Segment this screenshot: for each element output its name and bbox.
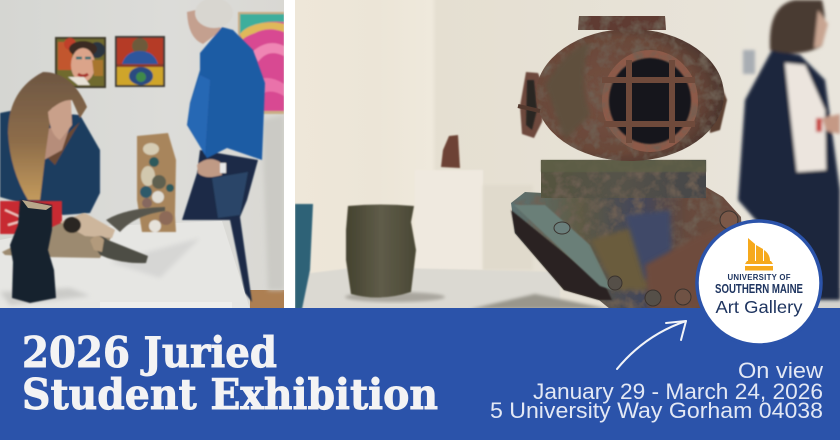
right port	[708, 88, 728, 134]
exhibition details text: 5 University Way Gorham 04038	[490, 398, 823, 423]
painting: face portrait	[55, 37, 106, 88]
title: 2026 Juried	[22, 328, 277, 377]
painting: figure with pattern	[115, 36, 165, 87]
exhibition details text: January 29 - March 24, 2026	[533, 379, 823, 404]
sculpture: horned skull	[2, 207, 165, 263]
helmet neck	[541, 160, 706, 198]
helmet bolts	[554, 211, 738, 306]
table top	[295, 267, 560, 309]
logo wordmark: SOUTHERN MAINE	[715, 282, 803, 296]
red box	[0, 201, 62, 234]
title	[22, 328, 438, 419]
sculpture: coral tower	[137, 133, 176, 232]
figure: woman leaning over	[0, 72, 100, 215]
painting: pink abstract	[238, 12, 284, 114]
logo wordmark: Art Gallery	[716, 297, 803, 317]
helmet base	[511, 187, 745, 309]
exhibition details text: On view	[738, 358, 824, 383]
exhibit table	[0, 221, 250, 309]
panel: right gallery photo	[295, 0, 840, 310]
exhibition details text	[490, 358, 824, 423]
helmet dome	[536, 29, 724, 161]
floor	[250, 290, 284, 309]
icon: gold university mark	[745, 238, 773, 270]
brown ceramic vase	[346, 204, 416, 298]
wall shadow	[262, 115, 284, 290]
diving helmet sculpture	[511, 16, 745, 309]
blue vase	[295, 204, 313, 309]
pedestal	[434, 170, 482, 270]
title: Student Exhibition	[22, 370, 438, 419]
panel: left gallery photo	[0, 0, 284, 309]
arrow pointing to logo	[617, 321, 686, 369]
logo wordmark: UNIVERSITY OF	[728, 273, 791, 282]
front window	[602, 50, 698, 152]
figure: man in blue shirt	[182, 0, 265, 302]
sculpture: black vase	[10, 200, 56, 303]
panel: blue title band	[0, 308, 840, 440]
logo badge	[697, 221, 821, 345]
left port	[520, 72, 543, 138]
small distant sculpture	[441, 135, 460, 168]
logo wordmark	[715, 273, 803, 317]
figure: woman in navy coat	[738, 0, 840, 300]
